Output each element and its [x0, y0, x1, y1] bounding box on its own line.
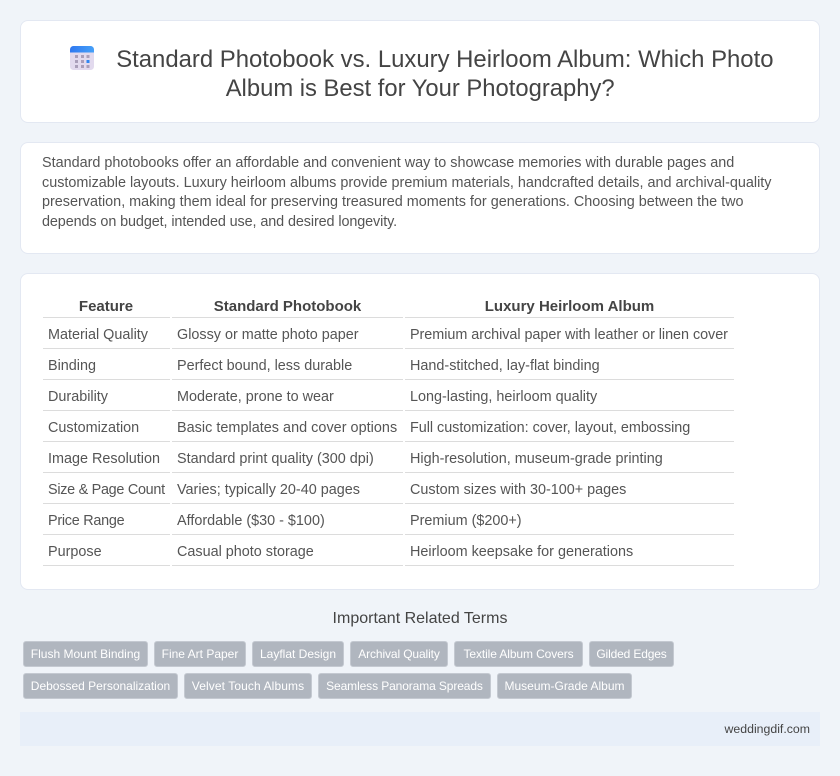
comparison table: Heirloom keepsake for generations — [410, 544, 633, 560]
comparison table: Perfect bound, less durable — [177, 358, 352, 374]
text block: introduction — [42, 155, 772, 230]
comparison table: Purpose — [48, 544, 102, 560]
related term tags — [23, 641, 674, 699]
footer: source: weddingdif.com — [725, 722, 810, 736]
comparison table: Price Range — [48, 513, 124, 529]
comparison table: Material Quality — [48, 327, 148, 343]
heading: related terms: Important Related Terms — [333, 610, 507, 627]
related term tags: Debossed Personalization — [31, 679, 170, 693]
title: Standard Photobook vs. Luxury Heirloom Album: Which Photo — [116, 46, 774, 73]
comparison table: Glossy or matte photo paper — [177, 327, 359, 343]
comparison table: Premium archival paper with leather or linen cover — [410, 327, 728, 343]
text block: introduction: preservation, making them ideal for preserving treasured moments for generations. Choosing between the two — [42, 194, 744, 210]
related term tags: Fine Art Paper — [162, 647, 238, 661]
comparison table: Long-lasting, heirloom quality — [410, 389, 597, 405]
related term tags: Archival Quality — [358, 647, 440, 661]
comparison table: Varies; typically 20-40 pages — [177, 482, 360, 498]
title: Album is Best for Your Photography? — [226, 74, 615, 102]
related term tags: Velvet Touch Albums — [192, 679, 304, 693]
comparison table: High-resolution, museum-grade printing — [410, 451, 663, 467]
comparison table: Basic templates and cover options — [177, 420, 397, 436]
panel: title card — [20, 20, 820, 123]
comparison table: Affordable ($30 - $100) — [177, 513, 325, 529]
comparison table: Hand-stitched, lay-flat binding — [410, 358, 600, 374]
footer bar — [20, 712, 820, 746]
text block: introduction: Standard photobooks offer an affordable and convenient way to showcase memories with durable pages and — [42, 155, 734, 171]
comparison table: Image Resolution — [48, 451, 160, 467]
comparison table: Durability — [48, 389, 108, 405]
comparison table: Customization — [48, 420, 139, 436]
comparison table: Binding — [48, 358, 96, 374]
comparison table: Moderate, prone to wear — [177, 389, 334, 405]
icon: calendar — [70, 46, 94, 70]
comparison table: Size & Page Count — [48, 482, 165, 498]
related term tags: Museum-Grade Album — [504, 679, 625, 693]
title — [116, 46, 774, 102]
text block: introduction: customizable layouts. Luxury heirloom albums provide premium materials, handcrafted details, and archival-quality — [42, 175, 771, 191]
related term tags: Layflat Design — [260, 647, 336, 661]
related term tags: Gilded Edges — [596, 647, 667, 661]
panel: introduction — [20, 142, 820, 254]
comparison table — [43, 298, 734, 566]
comparison table: Full customization: cover, layout, embossing — [410, 420, 690, 436]
text block: introduction: depends on budget, intended use, and desired longevity. — [42, 214, 397, 230]
comparison table: Casual photo storage — [177, 544, 314, 560]
comparison table: Premium ($200+) — [410, 513, 522, 529]
related term tags: Seamless Panorama Spreads — [326, 679, 483, 693]
comparison table: Custom sizes with 30-100+ pages — [410, 482, 626, 498]
related term tags: Flush Mount Binding — [31, 647, 140, 661]
panel: comparison table — [20, 273, 820, 590]
comparison table: Standard print quality (300 dpi) — [177, 451, 374, 467]
comparison table: Luxury Heirloom Album — [485, 298, 654, 315]
comparison table: Standard Photobook — [214, 298, 361, 315]
comparison table: Feature — [79, 298, 133, 315]
related term tags: Textile Album Covers — [463, 647, 574, 661]
